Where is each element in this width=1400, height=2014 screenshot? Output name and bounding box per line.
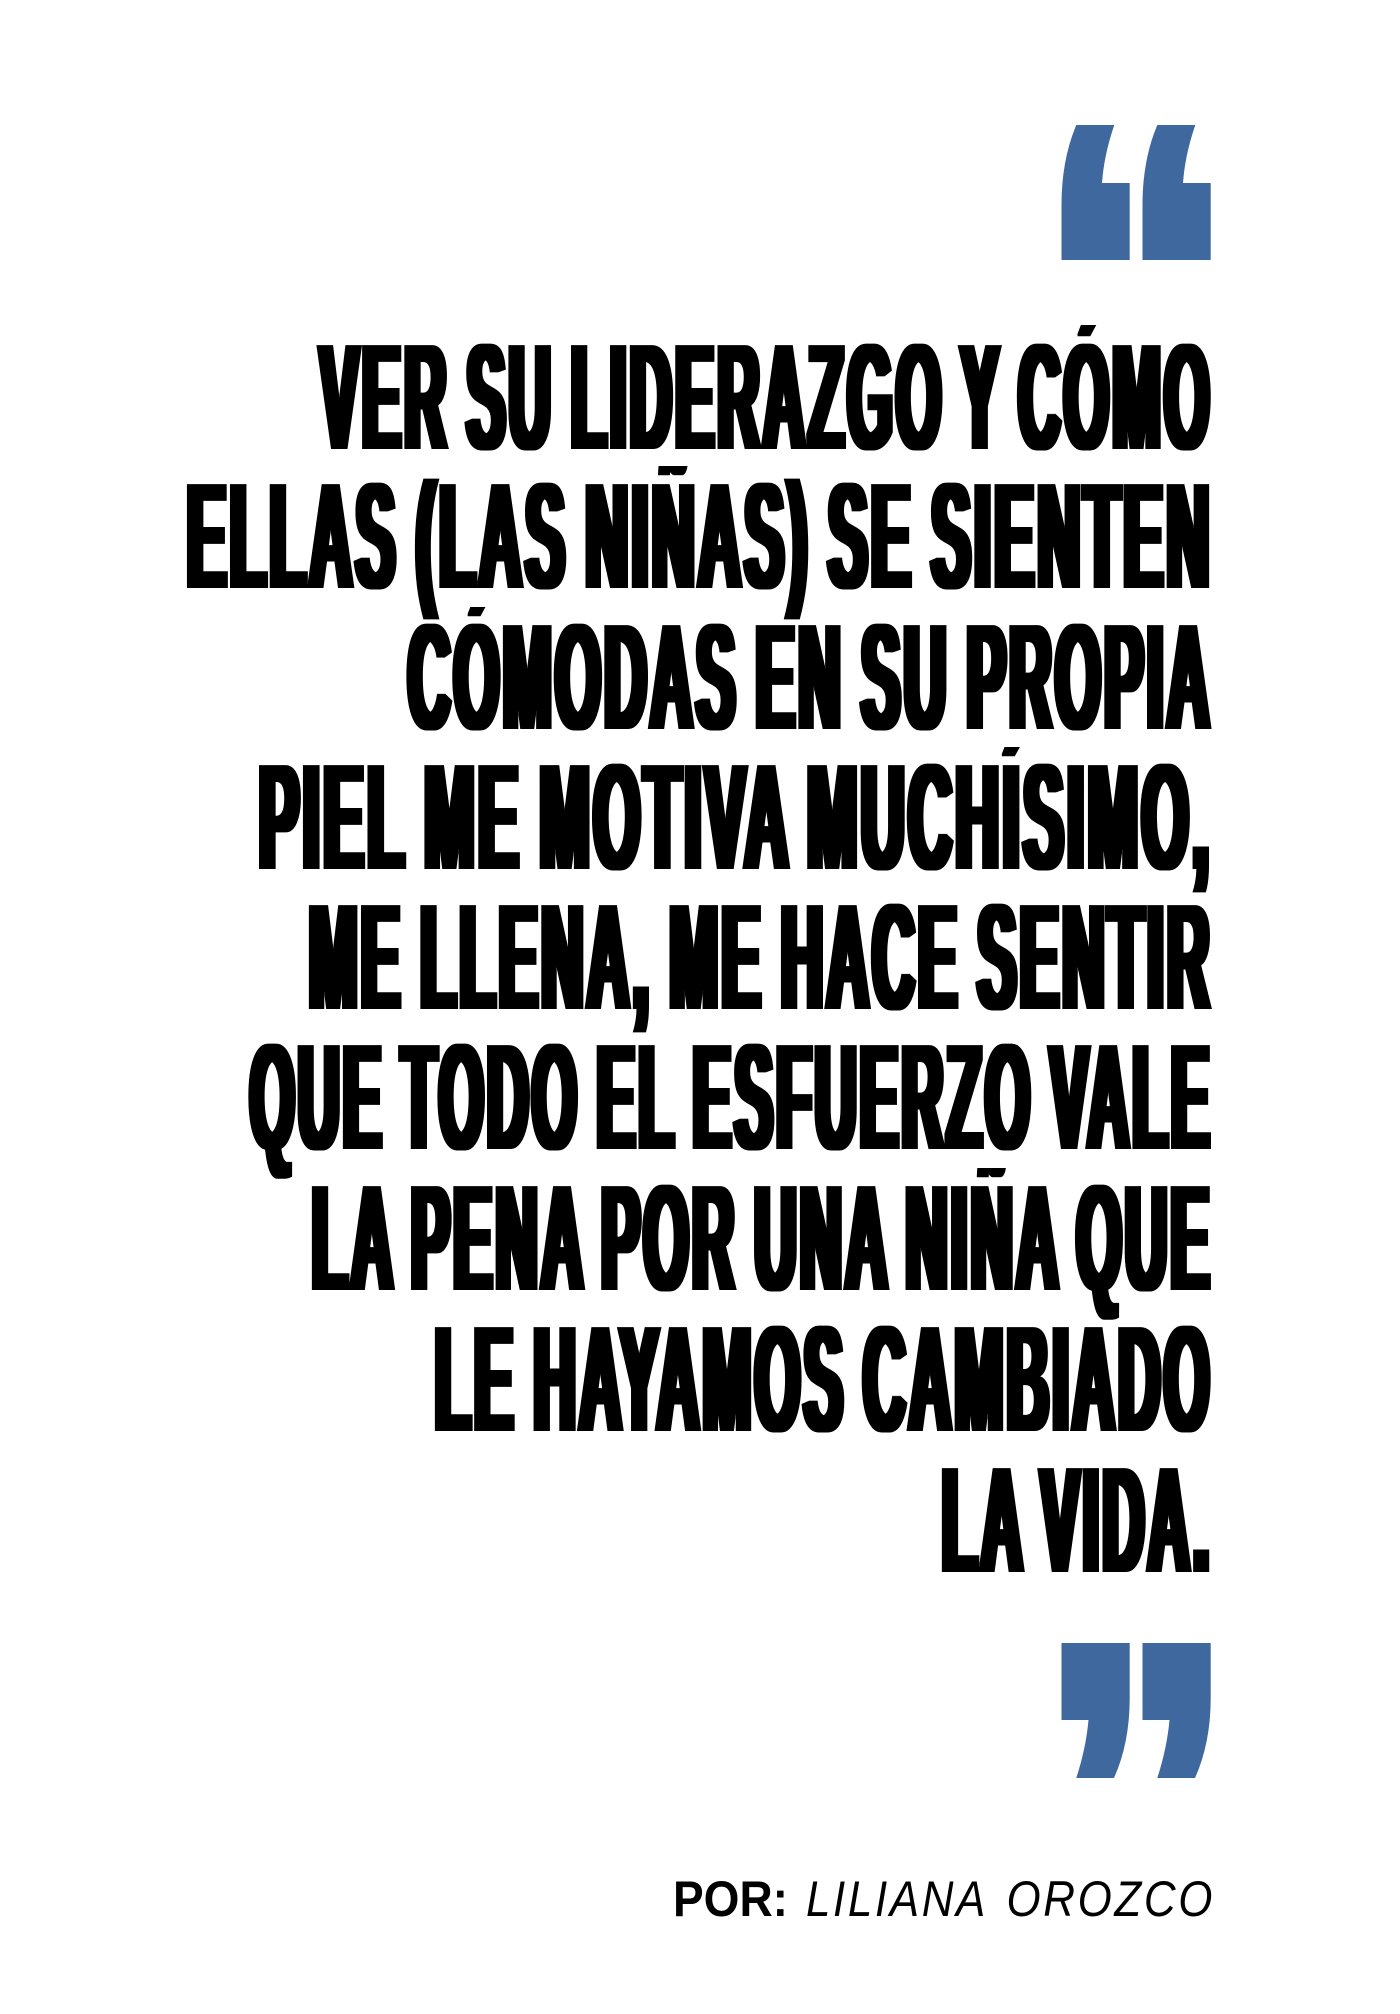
byline: LILIANA OROZCO [806, 1871, 1215, 1927]
icon: opening quotation mark [1062, 125, 1211, 260]
byline: POR: [673, 1871, 788, 1927]
byline [673, 1871, 1215, 1927]
quote text [187, 312, 1213, 1604]
icon: closing quotation mark [1062, 1643, 1211, 1778]
